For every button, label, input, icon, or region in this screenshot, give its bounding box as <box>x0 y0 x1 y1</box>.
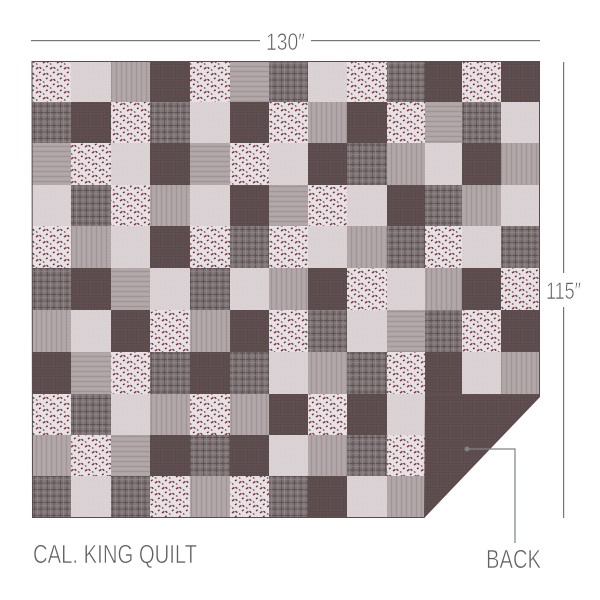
folded back corner <box>424 395 540 518</box>
back callout leader line <box>464 446 515 543</box>
row 3 patches <box>32 143 540 185</box>
height dimension line <box>563 62 564 518</box>
row 10 patches <box>32 435 425 476</box>
row 4 patches <box>32 185 540 226</box>
width label: 130″ <box>266 29 305 56</box>
row 2 patches <box>32 102 540 143</box>
quilt patchwork <box>32 61 540 518</box>
quilt binding edge <box>32 62 540 518</box>
row 5 patches <box>32 226 540 268</box>
row 6 patches <box>32 268 540 310</box>
row 1 patches <box>32 61 540 102</box>
back label: BACK <box>486 544 542 574</box>
row 11 patches <box>32 476 425 518</box>
quilt base <box>32 61 540 518</box>
row 8 patches <box>32 352 540 394</box>
width dimension line <box>31 40 540 41</box>
height label: 115″ <box>546 278 581 305</box>
quilt name caption: CAL. KING QUILT <box>33 539 197 569</box>
row 7 patches <box>32 310 540 352</box>
row 9 patches <box>32 394 425 435</box>
